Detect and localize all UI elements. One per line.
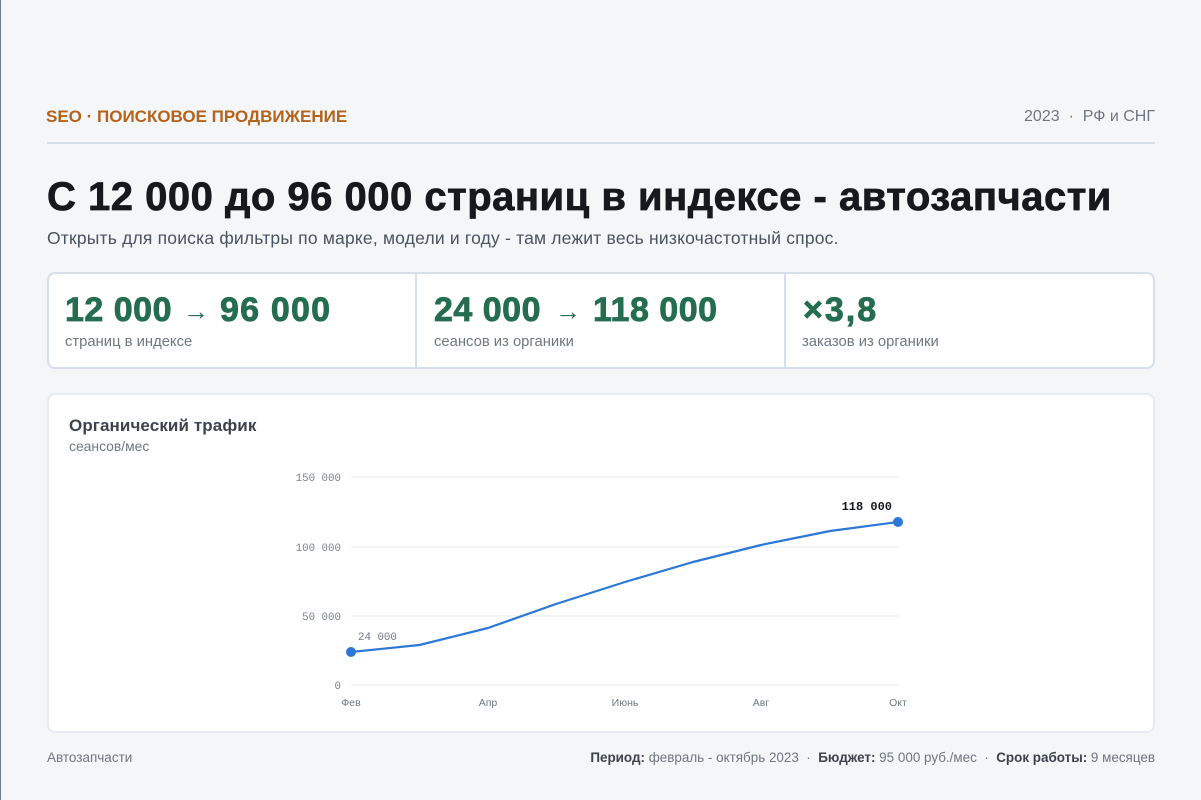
footer: category: Автозапчасти [47, 750, 132, 765]
KPI: pages in index: 96 000 [220, 291, 331, 329]
KPI: organic sessions [417, 274, 786, 367]
year and region: 2023 · РФ и СНГ [1024, 108, 1155, 125]
KPI: organic orders: заказов из органики [802, 334, 939, 350]
line chart: 0 [335, 681, 341, 693]
line chart: Окт [889, 697, 907, 709]
KPI: pages in index: → [183, 296, 209, 326]
line chart: 24 000 [358, 632, 397, 644]
subtitle: Открыть для поиска фильтры по марке, модели и году - там лежит весь низкочастотный спрос. [47, 228, 839, 248]
KPI: organic sessions: 24 000 [434, 291, 541, 329]
line chart: Апр [479, 697, 497, 709]
KPI: organic orders [802, 291, 939, 350]
chart heading: Органический трафик [69, 416, 256, 435]
eyebrow label: SEO · ПОИСКОВОЕ ПРОДВИЖЕНИЕ [46, 107, 347, 126]
KPI: organic sessions: 118 000 [593, 291, 718, 329]
KPI: organic sessions: → [555, 296, 581, 326]
line chart: 150 000 [296, 473, 341, 485]
line chart: Авг [753, 697, 769, 709]
line chart: 100 000 [296, 543, 341, 555]
title: С 12 000 до 96 000 страниц в индексе - автозапчасти [47, 175, 1112, 219]
line chart: Июнь [612, 697, 639, 709]
line chart: Фев [341, 697, 361, 709]
KPI: organic sessions: сеансов из органики [434, 334, 574, 350]
page edge line [0, 0, 1, 800]
KPI: pages in index: страниц в индексе [65, 334, 192, 350]
panel: traffic chart [47, 393, 1155, 733]
line chart: 50 000 [302, 612, 341, 624]
line chart: 118 000 [842, 500, 892, 514]
KPI: pages in index: 12 000 [65, 291, 172, 329]
KPI: pages in index [49, 274, 417, 367]
chart unit: сеансов/мес [69, 438, 149, 454]
panel: KPI strip [47, 272, 1155, 369]
footer: project meta: Период: февраль - октябрь 2023 · Бюджет: 95 000 руб./мес · Срок работы: 9 месяцев [590, 750, 1155, 765]
KPI: organic orders: ×3,8 [803, 291, 878, 329]
